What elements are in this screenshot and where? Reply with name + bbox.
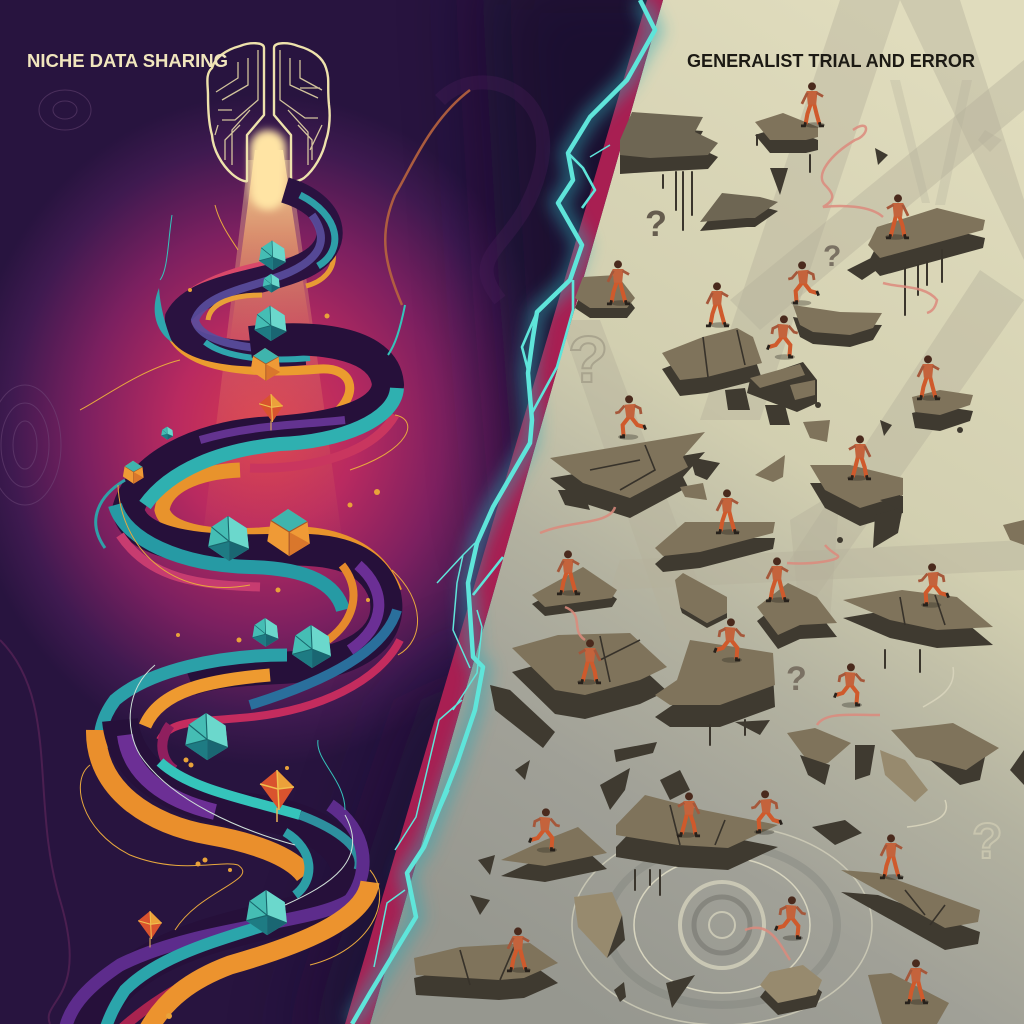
platform 14	[843, 590, 993, 672]
platform 16	[512, 633, 667, 719]
heading: left: NICHE DATA SHARING	[27, 51, 228, 71]
light beam from brain	[200, 130, 345, 560]
debris stones	[600, 742, 690, 810]
platform 17	[655, 640, 775, 745]
platform 18	[490, 685, 555, 748]
platform 6	[793, 305, 882, 347]
heading: right: GENERALIST TRIAL AND ERROR	[687, 51, 975, 71]
lightning: bolt	[352, 0, 655, 1024]
platform 23	[414, 943, 558, 1000]
platform 24	[760, 965, 822, 1015]
platform 5	[575, 275, 635, 318]
platform 26	[1003, 520, 1024, 545]
platform 1	[620, 112, 718, 230]
platform 13	[810, 465, 903, 548]
panel: niche data sharing background	[0, 0, 720, 1024]
platform 19	[616, 795, 778, 895]
question marks: ?	[568, 322, 608, 396]
rubble cluster A	[725, 362, 817, 425]
floating rock platforms	[414, 112, 1024, 1024]
platform 7	[662, 328, 762, 396]
platform 12	[532, 567, 617, 616]
question marks: ?	[786, 660, 807, 698]
platform 3	[700, 193, 778, 231]
question marks: ?	[645, 203, 667, 244]
platform 8	[912, 390, 973, 431]
stone small	[812, 820, 862, 845]
question marks	[568, 203, 1003, 869]
data gems	[123, 241, 331, 947]
sparks	[166, 288, 380, 1019]
ribbon hairlines	[80, 205, 418, 965]
question marks: ?	[972, 813, 1003, 869]
platform 4	[847, 208, 985, 315]
question marks: ?	[823, 240, 841, 273]
ribbon: middle braid	[96, 339, 400, 750]
small debris	[470, 148, 963, 1008]
tiny explorers	[507, 82, 949, 1005]
platform 22	[574, 892, 625, 958]
red trails	[540, 126, 937, 960]
platform 11	[675, 573, 727, 628]
ribbon: lower braid	[65, 720, 370, 1024]
stones	[755, 420, 830, 482]
platform 20	[501, 827, 607, 882]
pale trails	[907, 667, 953, 827]
platform 9	[550, 432, 720, 518]
platform 21	[841, 870, 980, 950]
ribbon: upper braid	[155, 190, 350, 414]
platform 15	[757, 583, 837, 649]
platform 10	[655, 522, 775, 572]
lightning: glow	[352, 0, 655, 1024]
panel: generalist trial and error background	[370, 0, 1024, 1024]
platform 2	[755, 113, 818, 172]
rubble cluster B	[787, 723, 1024, 802]
icon: circuit brain	[207, 43, 330, 182]
platform 25	[868, 973, 949, 1024]
divider: crimson band	[345, 0, 663, 1024]
panel: braided data ribbons	[65, 190, 418, 1024]
